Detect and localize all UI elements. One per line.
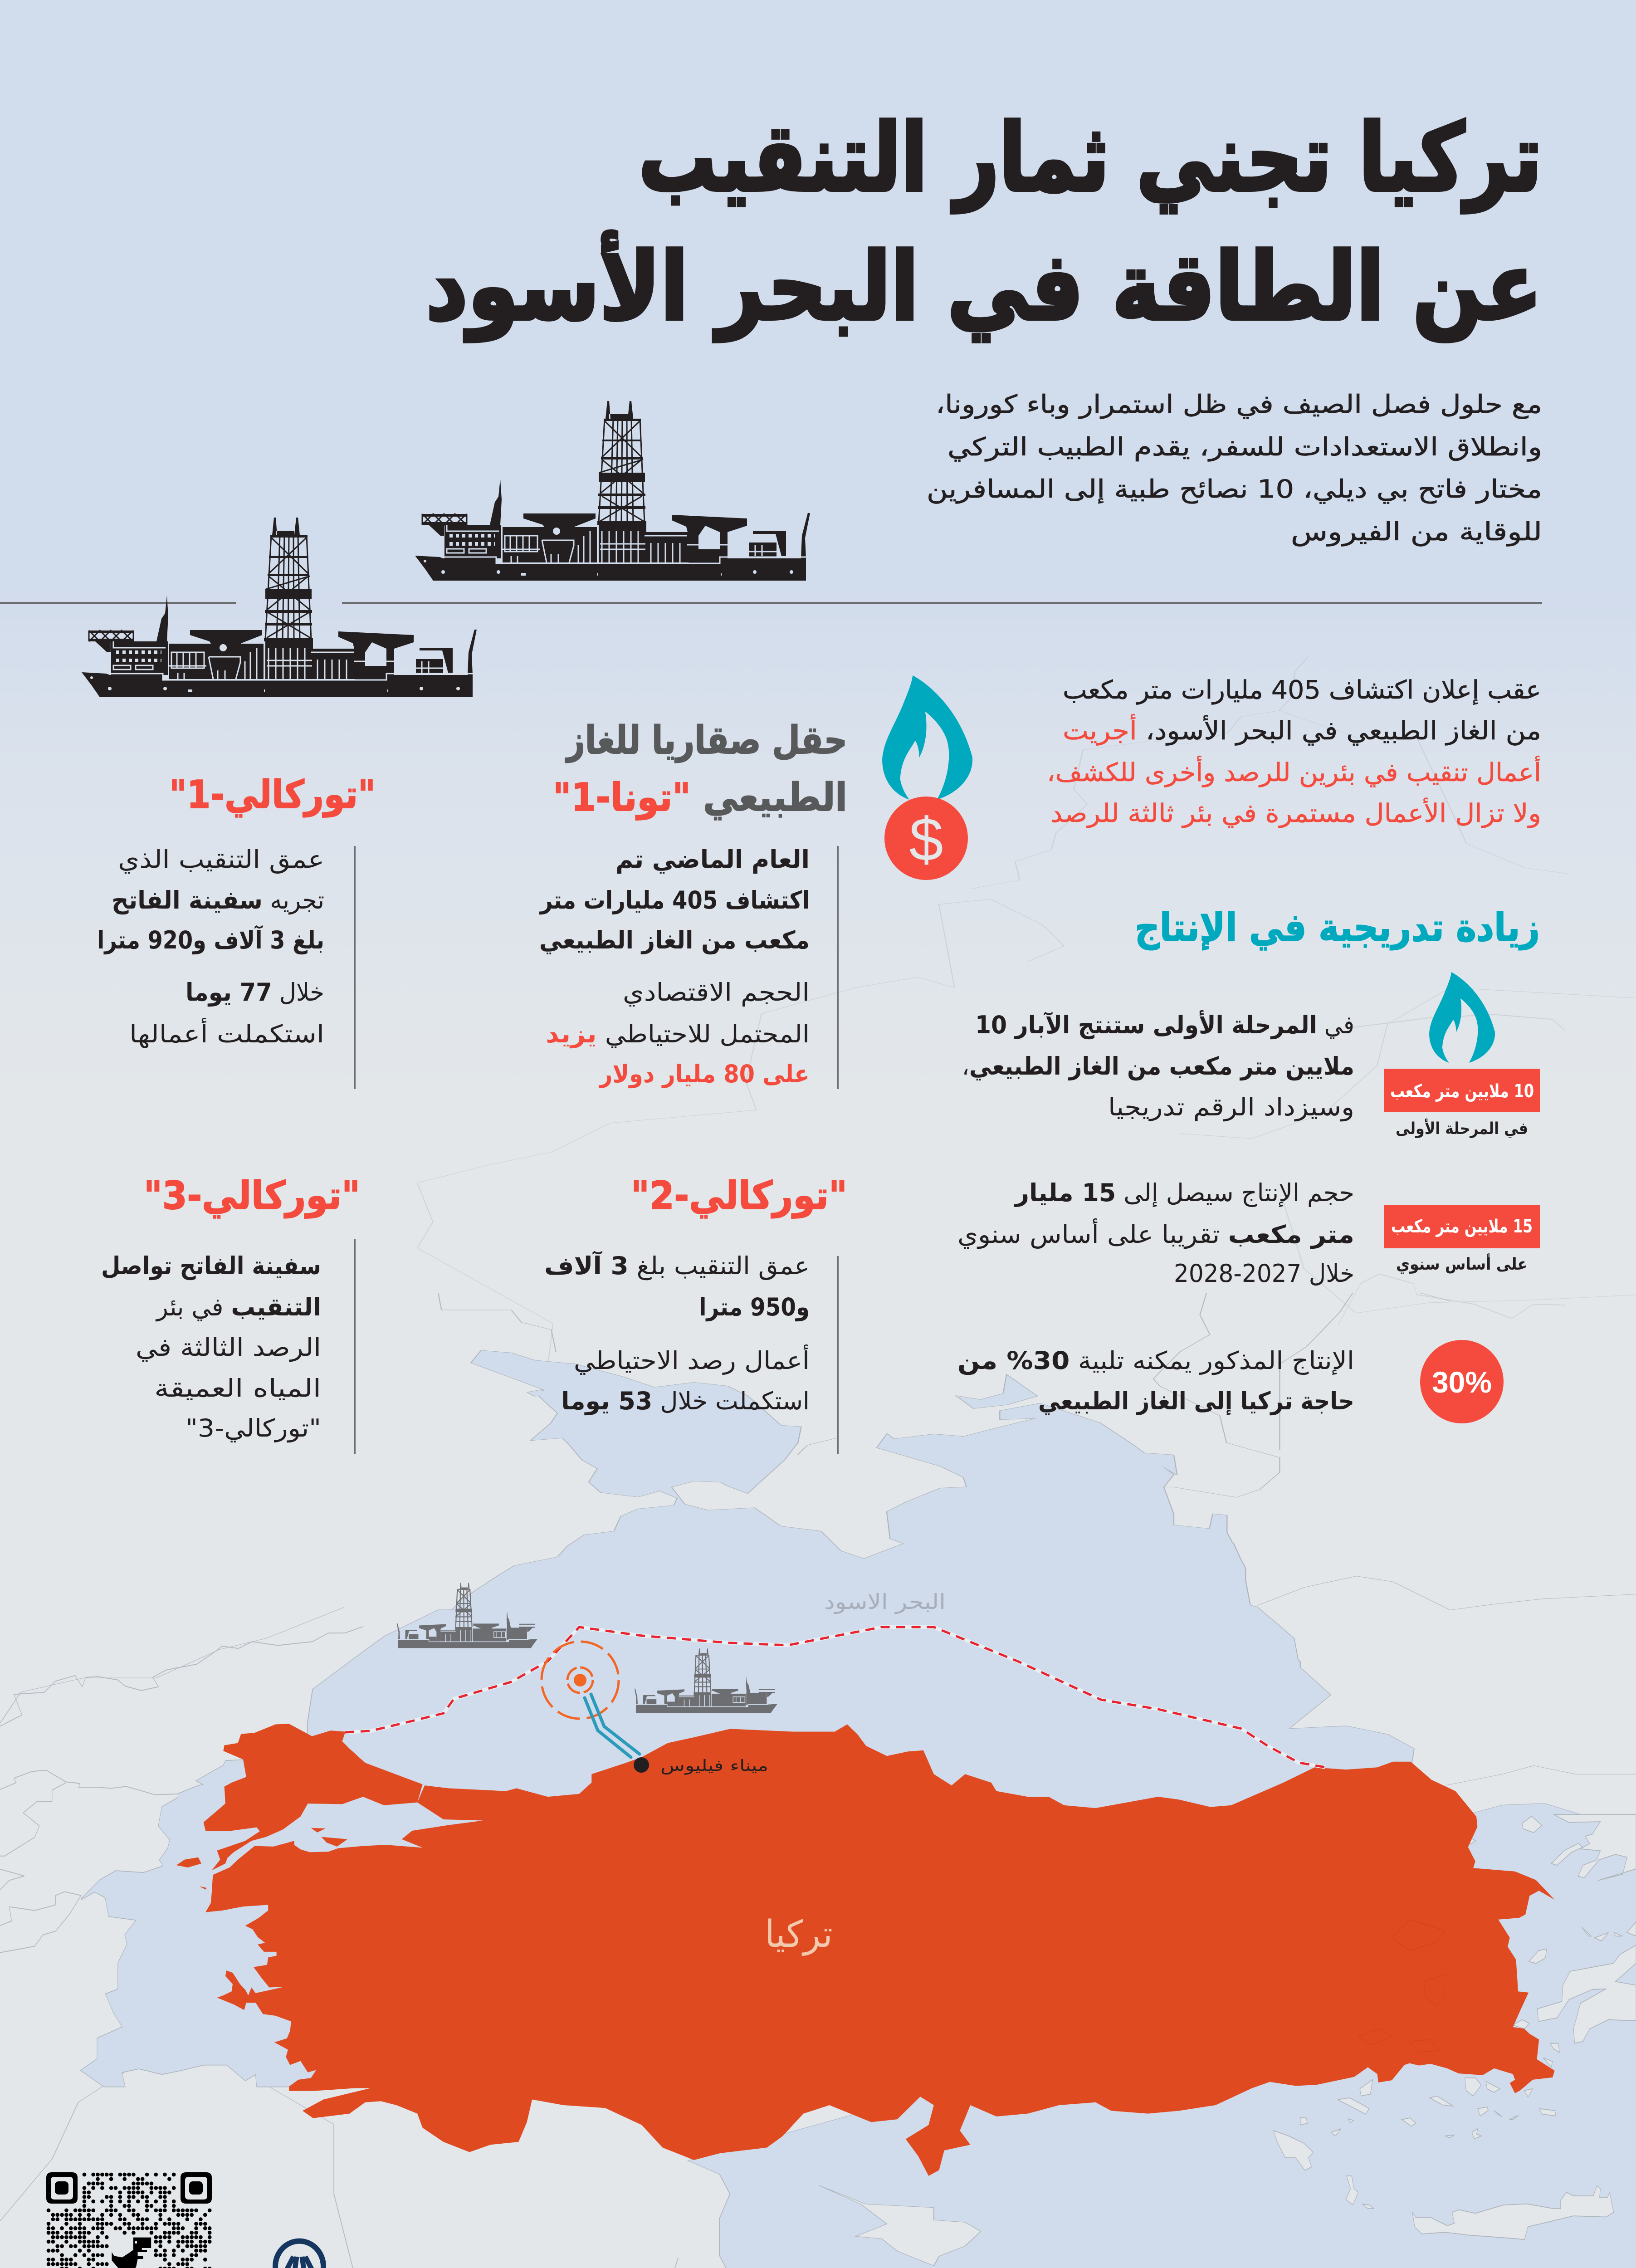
production stage one text: ملايين متر مكعب من الغاز الطبيعي، [962,1052,1354,1080]
panel: Tuna-1 text: على 80 مليار دولار [598,1060,810,1088]
production share text [952,1343,1361,1424]
QR code [46,2172,212,2268]
production stage one text: وسيزداد الرقم تدريجيا [1108,1093,1354,1121]
callout: 15 million cubic metres [1384,1205,1540,1277]
map: country borders [0,1270,1636,2268]
icon: ship on map west [396,1582,537,1648]
icon: drill ship lower [82,516,478,698]
faint country borders upper map [0,0,1636,1497]
callout: 10 million cubic metres: في المرحلة الأولى [1396,1118,1528,1138]
title [408,109,1551,354]
panel: Turkali-2 text: أعمال رصد الاحتياطي [574,1344,810,1375]
panel: Turkali-3 text: "توركالي-3" [186,1414,321,1442]
callout: 30 percent [1420,1340,1504,1423]
production annual text: متر مكعب تقريبا على أساس سنوي [957,1218,1354,1249]
callout: 10 million cubic metres: 10 ملايين متر مكعب [1390,1081,1534,1102]
panel: Turkali-3 text [98,1237,358,1455]
panel: Turkali-1 text: عمق التنقيب الذي [118,845,324,874]
panel: Turkali-2 text: عمق التنقيب بلغ 3 آلاف [544,1251,810,1281]
icon: drilling target [540,1640,620,1721]
panel: Tuna-1 text: اكتشاف 405 مليارات متر [539,886,810,914]
icon: ship on map east [634,1648,777,1713]
icon: gas flame with dollar coin: $ [909,805,943,874]
panel: Turkali-3 text: التنقيب في بئر [155,1293,321,1321]
panel: Turkali-1 text: استكملت أعمالها [129,1018,324,1048]
heading: Turkali-2: "توركالي-2" [631,1173,847,1218]
intro paragraph [921,386,1547,553]
heading: Turkali-1: "توركالي-1" [169,772,376,817]
icon: small gas flame [1429,972,1495,1063]
intro paragraph: وانطلاق الاستعدادات للسفر، يقدم الطبيب التركي [947,432,1542,462]
callout: 15 million cubic metres: على أساس سنوي [1396,1253,1528,1274]
production annual text: حجم الإنتاج سيصل إلى 15 مليار [1014,1178,1354,1207]
production share text: الإنتاج المذكور يمكنه تلبية 30% من [957,1346,1354,1375]
map: islands and neighbouring land [771,1792,1636,2268]
callout: 10 million cubic metres [1384,1069,1540,1141]
panel: Turkali-2 text: استكملت خلال 53 يوما [561,1387,810,1415]
production annual text: خلال 2027-2028 [1174,1259,1354,1288]
map: seas [0,1270,1636,2268]
heading: Sakarya gas field: حقل صقاريا للغاز [565,718,847,763]
panel: Turkali-3 text: الرصد الثالثة في [136,1333,321,1362]
panel: Turkali-2 text: و950 مترا [699,1293,810,1321]
header rule [0,602,1542,604]
production share text: حاجة تركيا إلى الغاز الطبيعي [1038,1387,1354,1415]
icon: drill ship upper [415,400,811,582]
panel: Turkali-1 text: خلال 77 يوما [186,978,324,1007]
discovery paragraph [1039,671,1547,835]
panel: Tuna-1 text: المحتمل للاحتياطي يزيد [546,1020,810,1048]
discovery paragraph: من الغاز الطبيعي في البحر الأسود، أجريت [1063,714,1541,746]
Filyos port [633,1755,771,1776]
intro paragraph: للوقاية من الفيروس [1291,517,1542,547]
callout: 30 percent: 30% [1432,1365,1492,1399]
panel: Tuna-1 text: الحجم الاقتصادي [623,978,810,1007]
panel: Turkali-3 text: المياه العميقة [154,1374,321,1403]
heading: Sakarya gas field [544,717,853,826]
heading: Turkali-3: "توركالي-3" [144,1173,360,1218]
discovery paragraph: أعمال تنقيب في بئرين للرصد وأخرى للكشف، [1047,756,1541,787]
panel: Tuna-1 text [535,844,844,1091]
panel: Turkali-1 text [91,844,358,1091]
icon: gas flame with dollar coin [880,671,975,882]
panel: Tuna-1 text: مكعب من الغاز الطبيعي [539,926,810,954]
panel: Turkali-1 text: بلغ 3 آلاف و920 مترا [97,925,324,954]
panel: Turkali-1 text: تجريه سفينة الفاتح [112,886,324,914]
map label: Turkey: تركيا [765,1913,833,1956]
panel: Tuna-1 text: العام الماضي تم [615,845,810,874]
discovery paragraph: ولا تزال الأعمال مستمرة في بئر ثالثة للرصد [1050,797,1541,828]
map: dashed maritime border [340,1619,1333,1774]
production stage one text [957,1007,1361,1125]
map: Turkey [172,1715,1560,2268]
intro paragraph: مختار فاتح بي ديلي، 10 نصائح طبية إلى المسافرين [927,474,1542,504]
production annual text [952,1175,1361,1293]
discovery paragraph: عقب إعلان اكتشاف 405 مليارات متر مكعب [1063,675,1541,705]
Filyos port: ميناء فيليوس [660,1757,768,1775]
panel: Turkali-3 text: سفينة الفاتح تواصل [101,1251,321,1280]
logo: Anadolu Ajansi [256,2236,342,2268]
panel: Turkali-2 text [540,1254,841,1456]
pipeline [581,1691,644,1760]
heading: Sakarya gas field: الطبيعي "تونا-1" [553,775,847,820]
intro paragraph: مع حلول فصل الصيف في ظل استمرار وباء كورونا، [936,390,1542,419]
map label: Black Sea: البحر الاسود [824,1589,946,1614]
callout: 15 million cubic metres: 15 ملايين متر مكعب [1391,1216,1533,1237]
heading: gradual increase in production: زيادة تدريجية في الإنتاج [1135,905,1540,950]
production stage one text: في المرحلة الأولى ستنتج الآبار 10 [975,1010,1354,1039]
